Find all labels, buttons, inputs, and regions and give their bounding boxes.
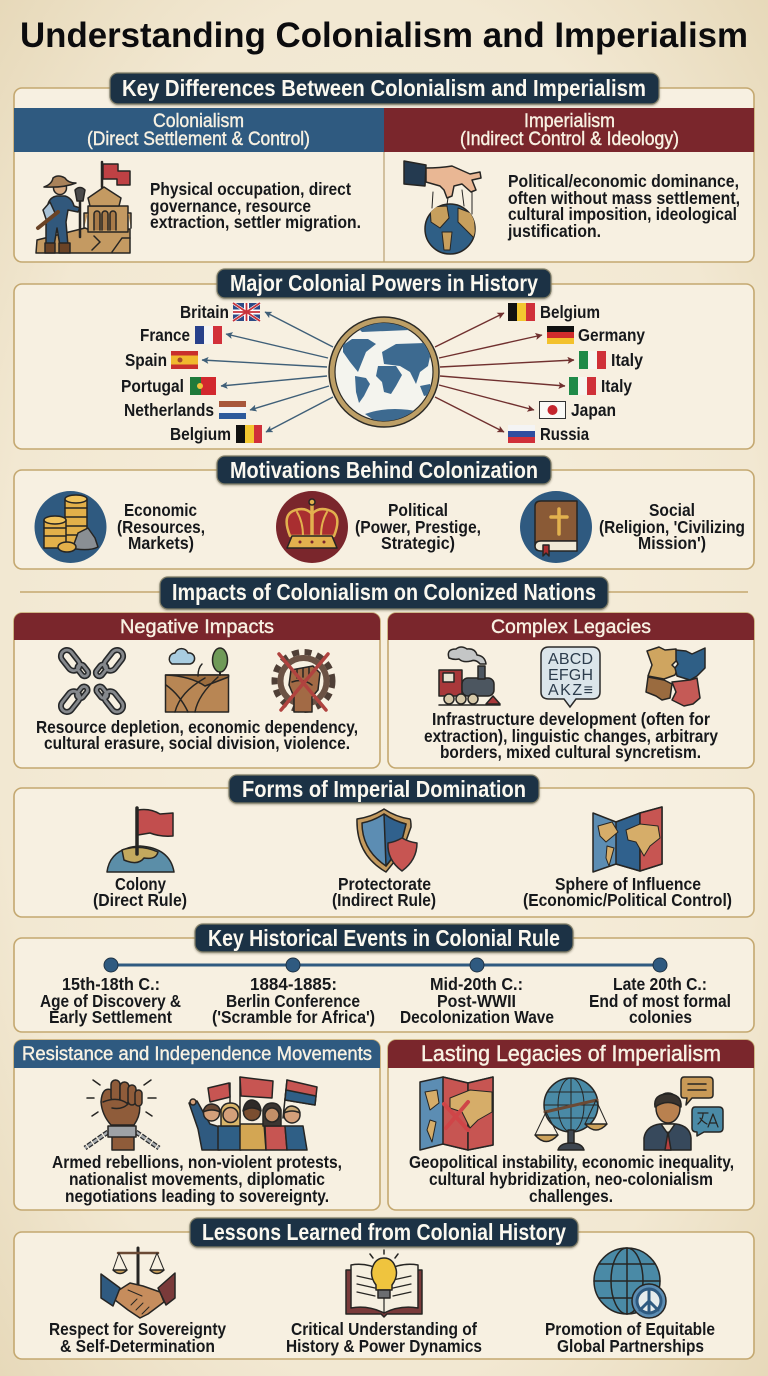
social label: Social [649, 500, 695, 520]
panel: major colonial powers [14, 284, 754, 449]
resistance text: nationalist movements, diplomatic [69, 1169, 325, 1189]
event: decolonization [400, 974, 554, 1027]
icon: protectorate shields [357, 809, 417, 872]
column header: colonialism: Colonialism [153, 111, 244, 132]
social label [599, 500, 745, 553]
event: decolonization: Mid-20th C.: [430, 974, 523, 994]
Britain [180, 302, 260, 322]
sphere of influence label: Sphere of Influence [555, 874, 701, 894]
Belgium [508, 302, 600, 322]
panel header: Resistance and Independence Movements [22, 1044, 372, 1065]
icon: alphabet speech bubble: ABCD [548, 651, 593, 668]
legacies text: cultural hybridization, neo-colonialism [429, 1169, 713, 1189]
icon: depleted land [166, 648, 228, 712]
colonialism description: extraction, settler migration. [150, 212, 361, 232]
arrows to right powers [435, 313, 574, 432]
globe [329, 317, 439, 427]
social label: Mission') [638, 533, 706, 553]
Belgium: Belgium [540, 302, 600, 322]
arrows to left powers [202, 312, 333, 432]
lesson: partnerships: Promotion of Equitable [545, 1319, 715, 1339]
political label: Strategic) [381, 533, 455, 553]
panel header: Lasting Legacies of Imperialism [421, 1041, 721, 1066]
colony label: Colony [115, 874, 166, 894]
event: decolonization: Decolonization Wave [400, 1007, 554, 1027]
icon: alphabet speech bubble: AKZ≡ [548, 682, 593, 699]
panel: lasting legacies [388, 1040, 754, 1210]
protectorate label: (Indirect Rule) [332, 890, 436, 910]
political label: (Power, Prestige, [355, 517, 481, 537]
lesson: sovereignty: & Self-Determination [60, 1336, 215, 1356]
Italy: Italy [611, 350, 643, 370]
heading: impacts: Impacts of Colonialism on Colonized Nations [172, 579, 596, 605]
complex legacies text: extraction), linguistic changes, arbitrary [424, 726, 718, 746]
political label: Political [388, 500, 448, 520]
Japan: Japan [571, 400, 616, 420]
panel: negative impacts [14, 613, 380, 768]
lesson: partnerships: Global Partnerships [557, 1336, 704, 1356]
panel header: Negative Impacts [120, 617, 274, 638]
imperialism description: cultural imposition, ideological [508, 204, 737, 224]
negative impacts text [36, 717, 358, 753]
France [140, 325, 222, 345]
resistance text [52, 1152, 342, 1206]
heading: key differences: Key Differences Between Colonialism and Imperialism [122, 75, 646, 101]
protectorate label [332, 874, 436, 910]
legacies text: challenges. [529, 1186, 613, 1206]
economic label: Markets) [128, 533, 194, 553]
event: end of colonies [589, 974, 731, 1027]
complex legacies text [424, 709, 718, 762]
event: age of discovery: 15th-18th C.: [62, 974, 160, 994]
Spain: Spain [125, 350, 167, 370]
event: berlin conference: ('Scramble for Africa') [212, 1007, 375, 1027]
icon: scales and handshake [101, 1248, 175, 1318]
economic label: Economic [124, 500, 197, 520]
imperialism description: justification. [507, 221, 601, 241]
Britain: Britain [180, 302, 229, 322]
political label [355, 500, 481, 553]
Germany: Germany [578, 325, 645, 345]
imperialism description: Political/economic dominance, [508, 171, 739, 191]
heading: motivations: Motivations Behind Colonization [230, 457, 538, 483]
panel: motivations [14, 470, 754, 569]
Belgium: Belgium [170, 424, 231, 444]
icon: raised fist with broken chain [85, 1080, 159, 1150]
icon: person with language bubbles [644, 1077, 723, 1150]
icon: crossed out map [420, 1077, 493, 1150]
Italy: Italy [601, 376, 632, 396]
event: end of colonies: colonies [629, 1007, 692, 1027]
negative impacts text: cultural erasure, social division, violence. [44, 733, 350, 753]
icon: globe on scales [535, 1078, 607, 1150]
complex legacies text: borders, mixed cultural syncretism. [440, 742, 701, 762]
panel: resistance [14, 1040, 380, 1210]
event: berlin conference: 1884-1885: [250, 974, 337, 994]
panel: lessons learned [14, 1232, 754, 1359]
Russia: Russia [540, 424, 589, 444]
event: decolonization: Post-WWII [437, 991, 516, 1011]
lesson: partnerships [545, 1319, 715, 1356]
sphere of influence label: (Economic/Political Control) [523, 890, 732, 910]
event: end of colonies: Late 20th C.: [613, 974, 707, 994]
Spain [125, 350, 198, 370]
colonialism description: Physical occupation, direct [150, 179, 351, 199]
icon: settler and fort [36, 162, 131, 253]
icon: steam train [439, 647, 500, 705]
social label: (Religion, 'Civilizing [599, 517, 745, 537]
column header: imperialism [384, 108, 754, 152]
lesson: critical understanding: Critical Understanding of [291, 1319, 477, 1339]
column header: colonialism: (Direct Settlement & Control) [87, 129, 310, 150]
panel: key differences [14, 88, 754, 262]
lesson: sovereignty: Respect for Sovereignty [49, 1319, 226, 1339]
icon: open book with light bulb [346, 1250, 422, 1317]
resistance text: negotiations leading to sovereignty. [65, 1186, 329, 1206]
Italy [569, 376, 632, 396]
icon: fist and gear crossed out [274, 652, 332, 712]
colony label [93, 874, 187, 910]
icon: hand puppeteering globe [404, 161, 481, 254]
Netherlands: Netherlands [124, 400, 214, 420]
lesson: sovereignty [49, 1319, 226, 1356]
event: age of discovery: Age of Discovery & [40, 991, 181, 1011]
icon: crown [276, 491, 348, 563]
event: age of discovery: Early Settlement [49, 1007, 172, 1027]
panel header [14, 613, 380, 640]
event: end of colonies: End of most formal [589, 991, 731, 1011]
colonialism description: governance, resource [150, 196, 311, 216]
imperialism description [507, 171, 740, 241]
legacies text: Geopolitical instability, economic inequality, [409, 1152, 734, 1172]
sphere of influence label [523, 874, 732, 910]
icon: map puzzle [646, 647, 705, 706]
event: berlin conference: Berlin Conference [226, 991, 360, 1011]
column header: colonialism [14, 108, 384, 152]
economic label [117, 500, 205, 553]
resistance text: Armed rebellions, non-violent protests, [52, 1152, 342, 1172]
event: age of discovery [40, 974, 181, 1027]
Germany [547, 325, 645, 345]
lesson: critical understanding: History & Power Dynamics [286, 1336, 482, 1356]
colonialism description [150, 179, 361, 232]
Russia [508, 424, 589, 444]
icon: broken chains [58, 648, 126, 714]
panel: key historical events [14, 938, 754, 1032]
colony label: (Direct Rule) [93, 890, 187, 910]
icon: holy book [520, 491, 592, 563]
timeline [104, 958, 667, 972]
complex legacies text: Infrastructure development (often for [432, 709, 710, 729]
heading: historical events: Key Historical Events in Colonial Rule [208, 925, 560, 951]
event: berlin conference [212, 974, 375, 1027]
icon: alphabet speech bubble: EFGH [548, 667, 593, 684]
column header: imperialism: Imperialism [524, 111, 615, 132]
icon: coins [34, 491, 106, 563]
panel header [388, 613, 754, 640]
Italy [579, 350, 643, 370]
panel: complex legacies [388, 613, 754, 768]
panel: forms of domination [14, 788, 754, 917]
economic label: (Resources, [117, 517, 205, 537]
icon: colony flag on hill [107, 808, 174, 872]
Portugal: Portugal [121, 376, 184, 396]
icon: folded world map [593, 807, 662, 872]
icon: alphabet speech bubble [541, 647, 600, 707]
legacies text [409, 1152, 734, 1206]
right powers list [508, 302, 645, 444]
France: France [140, 325, 190, 345]
heading: major powers: Major Colonial Powers in History [230, 270, 538, 296]
column header: imperialism: (Indirect Control & Ideology) [460, 129, 679, 150]
Japan [540, 400, 616, 420]
imperialism description: often without mass settlement, [508, 188, 740, 208]
heading: forms: Forms of Imperial Domination [242, 776, 526, 802]
title: Understanding Colonialism and Imperialism [20, 16, 748, 55]
lesson: critical understanding [286, 1319, 482, 1356]
icon: globe with peace sign [594, 1248, 666, 1318]
panel header: Complex Legacies [491, 617, 651, 638]
heading: lessons: Lessons Learned from Colonial History [202, 1219, 566, 1245]
left powers list [121, 302, 262, 444]
icon: protest crowd [189, 1077, 317, 1150]
protectorate label: Protectorate [338, 874, 431, 894]
negative impacts text: Resource depletion, economic dependency, [36, 717, 358, 737]
